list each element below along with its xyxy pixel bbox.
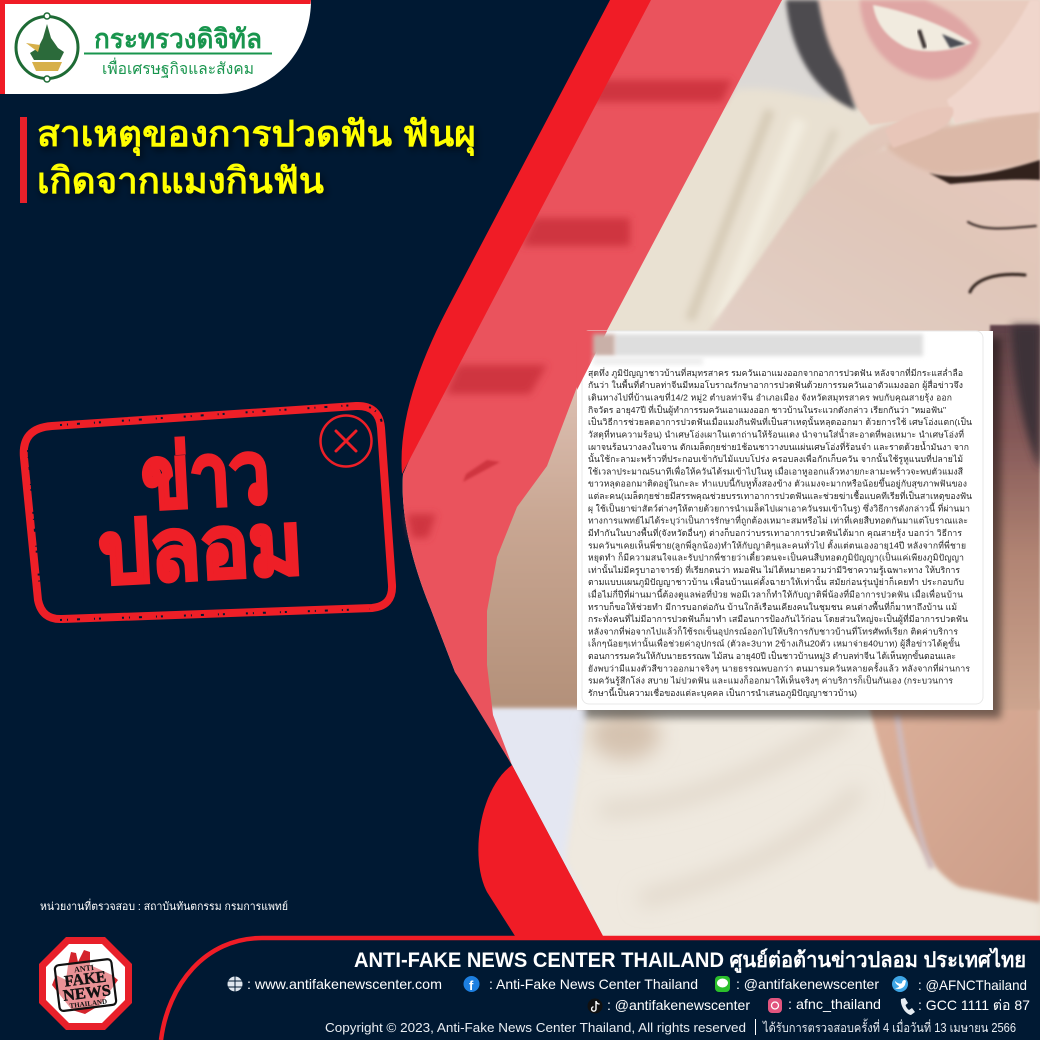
badge wordmark — [54, 959, 117, 1011]
card body text: ผุ ใช้เป็นยาฆ่าสัตว์ต่างๆให้ตายด้วยการนำเมล็ดไปเผาเอาควันรมเข้าในรู) ซึ่งวิธีการดังกล่าวนี้ ที่ผ่านมา — [588, 501, 970, 514]
card body text: เป็นวิธีการช่วยลดอาการปวดฟันเมื่อแมงกินฟันที่เป็นสาเหตุนั้นหลุดออกมา ด้วยการใช้ เศษโอ่งแตก(เป็น — [588, 415, 972, 428]
finger creases — [968, 222, 1036, 292]
icon: line — [715, 976, 730, 992]
icon: phone — [901, 998, 915, 1015]
ministry tagline: เพื่อเศรษฐกิจและสังคม — [102, 57, 254, 78]
card body text: หยุดทำ ก็มีความสนใจและรับปากพี่ชายว่าเดี๋ยวตนจะเป็นคนสืบทอดภูมิปัญญา(เป็นแค่เพียงภูมิปัญญา — [588, 551, 964, 564]
card body text: เดินทางไปที่บ้านเลขที่14/2 หมู่2 ตำบลท่าจีน อำเภอเมือง จังหวัดสมุทรสาคร พบกับคุณสายรุ้ง ออก — [588, 392, 952, 404]
index finger — [885, 110, 1040, 174]
strap — [897, 715, 932, 868]
fingertip — [892, 107, 954, 148]
blurred sender name — [615, 334, 923, 356]
card body text: เท่านั้นไม่มีครูบาอาจารย์) ที่เรียกตนว่า หมอฟัน ไม่ได้หมายความว่ามีวิชาความรู้เฉพาะทาง ให้บริการ — [588, 563, 960, 576]
icon: globe — [228, 976, 242, 992]
card body text: ใช้เวลาประมาณ5นาทีเพื่อให้ควันได้รมเข้าไปในหู เมื่อเอาหูออกแล้วหงายกะลามะพร้าวจะพบตัวแมงสี — [588, 465, 964, 477]
icon: facebook: f — [469, 978, 474, 993]
card body text: วัสดุที่ทนความร้อน) นำเศษโอ่งเผาในเตาถ่านให้ร้อนแดง นำจานใส่น้ำสะอาดที่พอเหมาะ นำเศษโอ่งที่ — [588, 428, 964, 440]
logo panel — [0, 0, 311, 94]
photo: person with toothache — [400, 0, 1040, 940]
badge wordmark: ANTI — [74, 963, 94, 974]
solid red band — [402, 0, 651, 474]
shaded bands under translucent red — [407, 80, 732, 538]
card body text: รมควันรู้สึกโล่ง สบาย ไม่ปวดฟัน และแมงก็ออกมาให้เห็นจริงๆ ค่าบริการก็เป็นกันเอง (กระบวนการ — [588, 675, 953, 687]
lips — [860, 0, 980, 80]
icon: facebook — [464, 976, 480, 993]
translucent red band — [403, 0, 782, 765]
badge wordmark: THAILAND — [69, 998, 108, 1010]
icon: instagram — [768, 998, 782, 1013]
stamp: fake news — [24, 405, 392, 620]
card body text: ตามแบบแผนภูมิปัญญาชาวบ้าน เพื่อนบ้านแค่ตั้งฉายาให้เท่านั้น สมัยก่อนรุ่นปู่ย่าก็เคยทำ ประกอบกับ — [588, 575, 964, 588]
news text card — [577, 331, 1001, 718]
card body text: กันว่า ในพื้นที่ตำบลท่าจีนมีหมอโบราณรักษาอาการปวดฟันด้วยการรมควันเอาตัวแมงออก ผู้สื่อข่าวจึง — [588, 378, 963, 391]
card body text: ขาวหลุดออกมาติดอยู่ในกะละ ทำแบบนี้กับหูทั้งสองข้าง ตัวแมงจะมากหรือน้อยขึ้นอยู่กับสุขภาพฟันของ — [588, 477, 967, 490]
card body text: ทางการแพทย์ไม่ได้ระบุว่าเป็นการรักษาที่ถูกต้องเหมาะสมหรือไม่ เท่าที่เคยสืบทอดกันมาแต่โบราณและ — [588, 515, 968, 527]
title — [20, 113, 476, 203]
icon: ministry emblem — [16, 13, 78, 82]
card body text: ตอนการรมควันให้กับนายธรรณพ ไม้สน อายุ40ปี เป็นชาวบ้านหมู่3 ตำบลท่าจีน ได้เห็นทุกขั้นตอนและ — [588, 649, 956, 662]
icon: tiktok — [588, 998, 602, 1014]
twitter account: : @AFNCThailand — [918, 977, 1027, 993]
teeth — [873, 5, 972, 51]
card body text: หลังจากที่พ่อจากไปแล้วก็ใช้รถเข็นอุปกรณ์ออกไปให้บริการกับชาวบ้านที่โทรศัพท์เรียก ติดค่าบริการ — [588, 625, 958, 637]
badge wordmark: FAKE — [63, 969, 107, 991]
card body text: นั้นใช้กะลามะพร้าวที่ประกอบเข้ากับไม้แบบโปร่ง ครอบลงเพื่อกักเก็บควัน จากนั้นใช้รูหูแนบที่ปลายไม้ — [588, 452, 963, 465]
card body text: กระทั่งคนที่ไม่มีอาการปวดฟันก็มาทำ เสมือนการป้องกันไว้ก่อน โดยส่วนใหญ่จะเป็นผู้ที่มีอาการปวดฟัน — [588, 613, 968, 625]
stamp: fake news: ข่าว — [139, 425, 272, 527]
neck — [868, 700, 1040, 903]
phone number: : GCC 1111 ต่อ 87 — [918, 997, 1030, 1013]
card body text: แต่ละคน(เมล็ดกุยช่ายมีสรรพคุณช่วยบรรเทาอาการปวดฟันและช่วยฆ่าเชื้อแบคทีเรียที่เป็นสาเหตุของฟัน — [588, 489, 972, 502]
red overlap at card corner — [577, 331, 607, 390]
right strip beside card — [990, 325, 1040, 710]
card body text: มีทำกันในบางพื้นที่(จังหวัดอื่นๆ) ต่างก็บอกว่าบรรเทาอาการปวดฟันได้มาก คุณสายรุ้ง บอกว่า วิธีการ — [588, 526, 962, 539]
thumb — [947, 0, 1040, 124]
instagram account: : afnc_thailand — [788, 996, 881, 1012]
verification date: ได้รับการตรวจสอบครั้งที่ 4 เมื่อวันที่ 13 เมษายน 2566 — [762, 1018, 1016, 1035]
card body text: รักษานี้เป็นความเชื่อของแต่ละบุคคล เป็นการนำเสนอภูมิปัญญาชาวบ้าน) — [588, 686, 857, 699]
card body text: เล็กๆน้อยๆเท่านั้นเพื่อช่วยค่าอุปกรณ์ (ตัวละ3บาท 2ข้างเกิน20ตัว เหมาจ่าย40บาท) ผู้สื่อข่าวได้ดูขั้น — [588, 637, 960, 650]
stamp: fake news: ปลอม — [96, 496, 305, 602]
hair — [786, 0, 856, 110]
facebook name: : Anti-Fake News Center Thailand — [489, 976, 698, 992]
badge wordmark: NEWS — [62, 982, 112, 1005]
icon: red hand — [52, 950, 118, 1014]
card body text — [588, 367, 972, 699]
footer panel — [161, 938, 1040, 1040]
ministry name: กระทรวงดิจิทัล — [94, 24, 262, 54]
tiktok account: : @antifakenewscenter — [607, 997, 750, 1013]
card body text: ยังพบว่ามีแมงตัวสีขาวออกมาจริงๆ นายธรรณพบอกว่า ตนมารมควันหลายครั้งแล้ว หลังจากที่ผ่านการ — [588, 661, 970, 673]
title: สาเหตุของการปวดฟัน ฟันผุ — [37, 113, 476, 157]
card body text: เผาจนร้อนวางลงในจาน ตักเมล็ดกุยช่าย1ช้อนชาวางบนแผ่นเศษโอ่งที่ร้อนจ๋า และราดด้วยน้ำมันงา จาก — [588, 440, 969, 453]
anti fake news badge — [39, 937, 132, 1030]
card body text: สุดทึ่ง ภูมิปัญญาชาวบ้านที่สมุทรสาคร รมควันเอาแมงออกจากอาการปวดฟัน หลังจากที่มีกระแสล่ำลือ — [588, 367, 963, 379]
backdrop behind the shoulder — [736, 2, 826, 98]
arm skin — [487, 388, 582, 710]
source agency: หน่วยงานที่ตรวจสอบ : สถาบันทันตกรรม กรมการแพทย์ — [40, 898, 288, 913]
website: : www.antifakenewscenter.com — [247, 976, 442, 992]
footer headline: ANTI-FAKE NEWS CENTER THAILAND ศูนย์ต่อต้านข่าวปลอม ประเทศไทย — [354, 947, 1026, 974]
face and chin — [817, 0, 1040, 130]
icon: twitter — [892, 976, 908, 992]
title: เกิดจากแมงกินฟัน — [37, 160, 324, 201]
red corner shape, lower centre — [478, 765, 603, 936]
lower shirt — [565, 700, 1040, 940]
hand — [822, 120, 1020, 178]
line account: : @antifakenewscenter — [736, 976, 879, 992]
card body text: เมื่อไม่กี่ปีที่ผ่านมานี้ต้องดูแลพ่อที่ป่วย พอมีเวลาก็ทำให้กับญาติพี่น้องที่มีอาการปวดฟัน เมื่อเพื่อนบ้าน — [588, 588, 963, 600]
shirt — [684, 90, 838, 322]
card body text: รมควันฯเคยเห็นพี่ชาย(ลูกพี่ลูกน้อง)ทำให้กับญาติๆและคนทั่วไป ตั้งแต่ตนเองอายุ14ปี หลังจากที่พี่ชาย — [588, 538, 966, 551]
white sheet, lower left — [492, 705, 603, 936]
card body text: กิจวัตร อายุ47ปี ที่เป็นผู้ทำการรมควันเอาแมงออก ชาวบ้านในระแวกดังกล่าว เรียกกันว่า "หมอฟัน" — [588, 404, 946, 416]
card body text: ทราบก็ขอให้ช่วยทำ มีการบอกต่อกัน บ้านใกล้เรือนเคียงคนในชุมชน คนต่างพื้นที่ก็มาหาถึงบ้าน แม้ — [588, 600, 957, 613]
copyright: Copyright © 2023, Anti-Fake News Center Thailand, All rights reserved — [325, 1021, 746, 1035]
